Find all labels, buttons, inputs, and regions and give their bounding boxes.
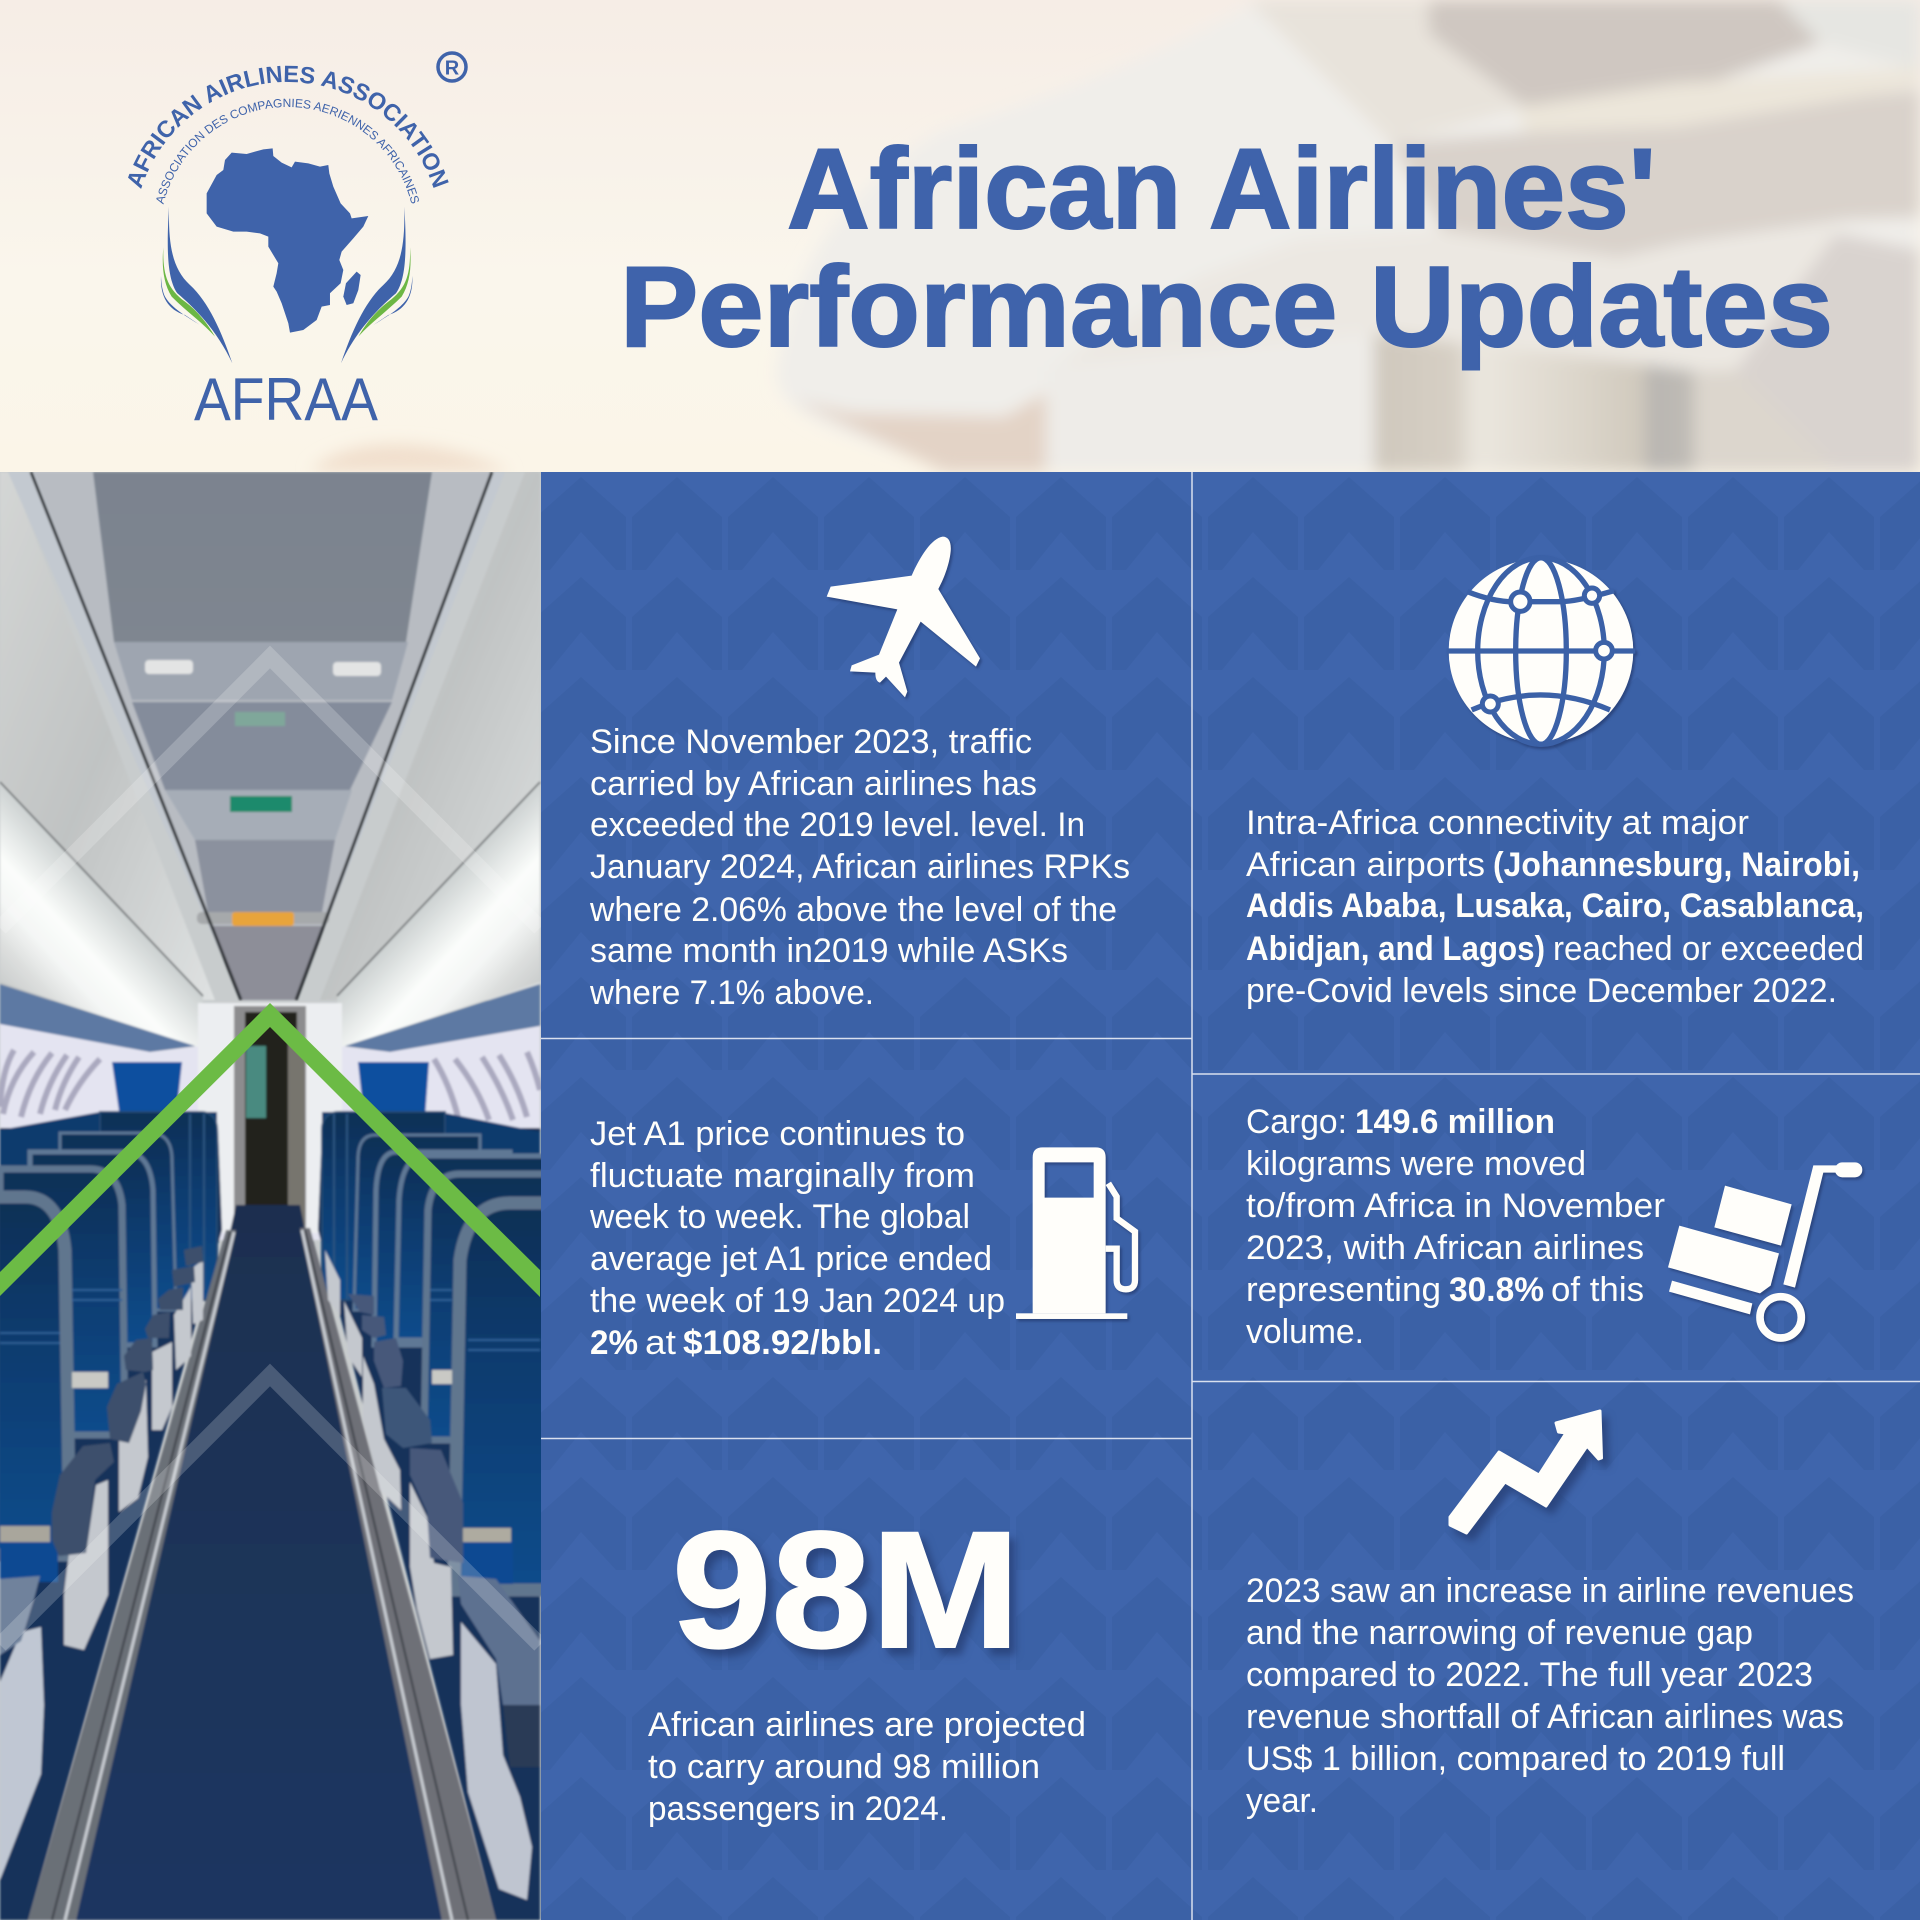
icon: globe [1447,558,1635,744]
translucent chevron upper [0,657,540,928]
jet fuel text: the week of 19 Jan 2024 up [590,1282,1005,1320]
translucent chevron lower [0,1375,540,1645]
central grey ceiling panel [93,472,432,642]
lower panel [132,702,392,790]
sign [235,712,285,726]
revenues text [1246,1572,1854,1820]
revenues text: revenue shortfall of African airlines was [1246,1698,1844,1736]
blue content panel background [541,472,1920,1920]
galley frame [234,1006,306,1228]
header background: blurred aircraft photo [0,0,1920,472]
traffic text: carried by African airlines has [590,765,1037,803]
wall [0,1024,540,1240]
cargo text: to/from Africa in November [1246,1187,1665,1225]
passengers text: African airlines are projected [648,1706,1086,1744]
cargo text: 149.6 million [1355,1103,1555,1141]
map of Africa [207,148,368,333]
jet fuel text: $108.92/bbl. [683,1324,882,1362]
icon: airplane [827,537,980,697]
curtain right [358,1062,429,1118]
orange sign bar [197,912,329,924]
jet fuel text [589,1115,1005,1362]
white bulkhead [198,1003,342,1233]
title [620,126,1833,371]
connectivity text: reached or exceeded [1553,930,1864,968]
panel: cargo [1246,1103,1862,1351]
right armrests [348,1294,540,1767]
black edge left [31,472,241,1000]
left floor rail [28,1230,236,1920]
right seat side panels [325,1250,532,1900]
icon: rising arrow [1450,1411,1602,1533]
revenues text: year. [1246,1782,1318,1820]
logo inner arc text: ASSOCIATION DES COMPAGNIES AERIENNES AFRICAINES [156,98,419,204]
cargo text: kilograms were moved [1246,1145,1586,1183]
logo outer arc text: AFRICAN AIRLINES ASSOCIATION [128,66,449,189]
passengers text [648,1706,1086,1828]
left dark carpet [0,1128,222,1920]
panel: 98M passengers [648,1498,1086,1828]
AFRAA wordmark: AFRAA [194,366,378,433]
right swoosh [341,207,412,363]
icon: hand truck with boxes [1668,1162,1862,1338]
galley right door [288,1040,305,1225]
revenues text: and the narrowing of revenue gap [1246,1614,1753,1652]
central ceiling light grey [35,472,490,926]
cargo text: representing [1246,1271,1441,1309]
panel: revenues [1246,1411,1854,1820]
green sign [230,796,292,812]
left rail dark line [52,1232,230,1920]
registered mark [438,53,466,81]
right rail highlight [302,1230,452,1920]
ceiling lower panel [195,840,335,912]
traffic text: where 7.1% above. [589,974,874,1012]
connectivity text: Intra-Africa connectivity at major [1246,804,1749,842]
overhead lit band right [337,782,540,1048]
traffic text: where 2.06% above the level of the [589,891,1117,929]
traffic text [589,723,1130,1012]
connectivity text: Abidjan, and Lagos) [1246,930,1545,968]
connectivity text: African airports [1246,846,1485,884]
right floor rail [300,1228,496,1920]
black edge right [296,472,492,1000]
panel grid lines [541,472,1920,1920]
cargo text: 30.8% [1449,1271,1544,1309]
cushions and belts [0,1370,513,1584]
jet fuel text: fluctuate marginally from [590,1157,975,1195]
lowest ceiling [210,926,322,1000]
galley colours [246,1046,266,1118]
floor [76,1205,442,1920]
panel band with vents [114,642,408,700]
jet fuel text: Jet A1 price continues to [590,1115,965,1153]
connectivity text: Addis Ababa, Lusaka, Cairo, Casablanca, [1246,887,1864,925]
registered mark: R [445,58,460,80]
revenues text: US$ 1 billion, compared to 2019 full [1246,1740,1785,1778]
seats left [0,1112,217,1555]
blue-grey bin underside left [0,984,195,1052]
traffic text: same month in2019 while ASKs [590,932,1068,970]
panel: traffic [589,537,1130,1012]
jet fuel text: at [645,1324,677,1362]
galley interior [245,1012,297,1208]
orange sign [232,912,294,926]
jet fuel text: 2% [590,1324,638,1362]
far seat rows right [322,1112,540,1300]
seats right [322,1112,560,1590]
cargo text: of this [1551,1271,1644,1309]
bin line right [337,782,540,996]
AFRAA logo [128,51,468,433]
traffic text: January 2024, African airlines RPKs [590,848,1130,886]
left seat side panels [0,1260,203,1880]
ceiling side panel right [320,472,540,1000]
window ribs right [434,1052,540,1120]
panel: jet fuel [589,1115,1135,1362]
panel: connectivity [1246,558,1864,1010]
big number: 98M [672,1498,1020,1683]
cargo text [1246,1103,1665,1351]
blue-grey bin underside right [345,984,540,1052]
ceiling side panel left [0,472,215,1000]
traffic text: Since November 2023, traffic [590,723,1032,761]
passengers text: passengers in 2024. [648,1790,948,1828]
title: African Airlines' [787,126,1656,253]
cabin photograph panel [0,472,560,1920]
left armrests [0,1246,203,1655]
jet fuel text: average jet A1 price ended [590,1240,992,1278]
cargo text: 2023, with African airlines [1246,1229,1644,1267]
traffic text: exceeded the 2019 level. level. In [590,806,1085,844]
passengers text: to carry around 98 million [648,1748,1040,1786]
cargo text: Cargo: [1246,1103,1347,1141]
green exit band [165,790,352,840]
left swoosh [161,207,232,363]
jet fuel text: week to week. The global [589,1198,970,1236]
connectivity text: (Johannesburg, Nairobi, [1493,846,1860,884]
vent right [333,662,381,676]
right dark carpet [318,1128,540,1920]
revenues text: 2023 saw an increase in airline revenues [1246,1572,1854,1610]
revenues text: compared to 2022. The full year 2023 [1246,1656,1813,1694]
icon: fuel pump [1016,1147,1135,1319]
right rail dark line [305,1230,468,1920]
window ribs left [0,1050,100,1117]
connectivity text [1246,804,1864,1010]
far seat rows left [0,1110,218,1165]
curtain left [112,1062,182,1118]
cargo text: volume. [1246,1313,1364,1351]
central ceiling strip [9,472,494,960]
bin line left [0,782,203,996]
title: Performance Updates [620,244,1833,371]
overhead lit band left [0,782,203,1048]
connectivity text: pre-Covid levels since December 2022. [1246,972,1837,1010]
vent left [145,660,193,674]
left rail highlight [65,1232,234,1920]
green chevron [0,1003,540,1297]
